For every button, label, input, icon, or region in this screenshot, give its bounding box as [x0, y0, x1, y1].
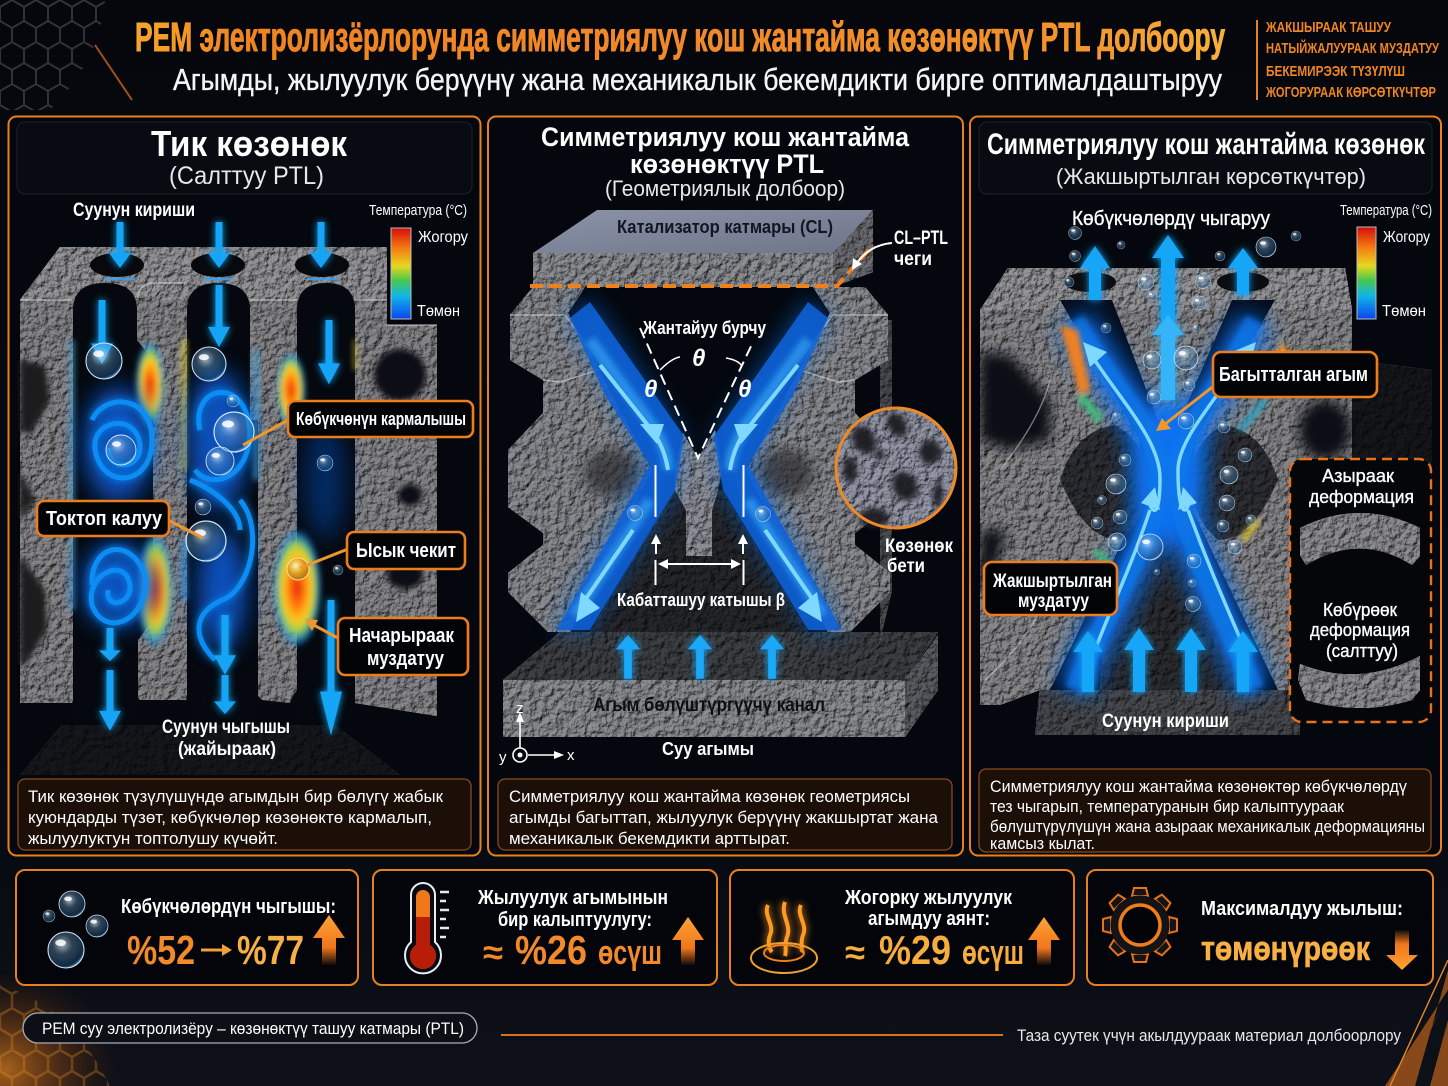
axes	[499, 700, 575, 766]
footer pill: PEM суу электролизёру – көзөнөктүү ташуу катмары (PTL)	[42, 1019, 464, 1038]
value: ≈	[845, 934, 865, 972]
catalyst layer	[533, 210, 873, 287]
CL-PTL interface dashed line and label	[530, 228, 948, 286]
callout: bubble trapping: Көбүкчөнүн кармалышы	[296, 409, 466, 429]
temperature legend: Жогору	[1383, 229, 1430, 246]
callout: directed flow	[1156, 352, 1377, 431]
inclination angle annotation: θ	[644, 376, 657, 403]
KPI card: bubble removal	[16, 870, 358, 985]
panel 1 description	[18, 779, 471, 850]
KPI card: heat flux uniformity	[373, 870, 717, 985]
heat zones on channel walls	[72, 340, 355, 648]
KPI card: heat flux uniformity: бир калыптуулугу:	[498, 909, 652, 931]
panel 2 heading: Симметриялуу кош жантайма	[541, 122, 910, 152]
panel 2 description	[498, 779, 952, 850]
panel 2 heading: көзөнөктүү PTL	[630, 149, 824, 179]
subtitle: Агымды, жылуулук берүүнү жана механикалык бекемдикти бирге оптималдаштыруу	[173, 62, 1222, 97]
value: %29	[879, 927, 951, 973]
bubbles	[86, 343, 343, 580]
water inlet label: Суунун кириши	[1102, 711, 1229, 732]
panel 3 description: тез чыгарып, температуранын бир калыптуураак	[990, 798, 1345, 816]
arrow up	[672, 917, 704, 965]
catalyst layer: Катализатор катмары (CL)	[617, 217, 833, 237]
value: өсүш	[962, 934, 1024, 972]
value: өсүш	[598, 934, 662, 972]
top-right benefits list: БЕКЕМИРЭЭК ТҮЗҮЛҮШ	[1266, 63, 1405, 80]
icon: gear	[1103, 888, 1177, 962]
panel: vertical pores	[8, 116, 480, 856]
flow distribution channel	[503, 632, 938, 737]
panel: improved performance	[970, 116, 1441, 856]
porous block with straight channels	[20, 247, 437, 775]
value	[127, 927, 304, 973]
less deformation sample	[1300, 513, 1420, 565]
up arrows	[1073, 235, 1258, 692]
deformation comparison box: деформация	[1310, 620, 1410, 640]
axes: y	[499, 749, 507, 766]
inclination angle annotation: θ	[738, 376, 751, 403]
KPI card: maximum displacement	[1087, 870, 1433, 985]
inclination angle annotation: θ	[692, 345, 705, 372]
panel 1 description: Тик көзөнөк түзүлүшүндө агымдын бир бөлүгү жабык	[28, 787, 444, 806]
pore surface magnified view	[836, 408, 956, 528]
value	[483, 927, 662, 973]
callout: stagnation	[37, 501, 203, 538]
water vortices and flow lines	[82, 222, 345, 736]
temperature legend: Жогору	[418, 229, 468, 246]
icon: thermometer	[405, 883, 449, 973]
axes: x	[567, 747, 575, 764]
callout: stagnation: Токтоп калуу	[46, 508, 163, 530]
footer tagline: Таза суутек үчүн акылдуураак материал долбоорлору	[1017, 1026, 1401, 1045]
arrow up	[313, 915, 345, 965]
CL-PTL interface dashed line and label: CL–PTL	[894, 228, 948, 249]
overlap ratio annotation	[617, 465, 785, 610]
water outlet label: Суунун чыгышы	[162, 717, 290, 738]
icon: heat	[751, 902, 817, 973]
inflow arrows	[616, 635, 784, 679]
flow distribution channel: Агым бөлүштүргүүчү канал	[593, 695, 825, 716]
porous block with X channel	[980, 268, 1432, 735]
inclined pore structure	[508, 287, 892, 640]
panel 1 description: куюндарды түзөт, көбүкчөлөр көзөнөктө кармалып,	[28, 808, 432, 827]
pore surface label: Көзөнөк	[885, 536, 953, 557]
panel 2 description: агымды багыттап, жылуулук берүүнү жакшыртат жана	[509, 808, 939, 827]
temperature legend: Төмөн	[1382, 303, 1426, 320]
pore surface label: бети	[887, 556, 925, 577]
footer pill	[23, 1013, 477, 1043]
axes: z	[516, 700, 524, 717]
panel 3 description: Симметриялуу кош жантайма көзөнөктөр көбүкчөлөрдү	[990, 778, 1408, 796]
deformation comparison box: Азыраак	[1322, 466, 1394, 486]
KPI card: high heat flux area: Жогорку жылуулук	[844, 887, 1013, 909]
CL-PTL interface dashed line and label: чеги	[894, 249, 932, 270]
arrow down	[1386, 930, 1418, 970]
value: %26	[515, 927, 587, 973]
deformation comparison box: (салттуу)	[1326, 641, 1398, 661]
deformation comparison box	[1290, 459, 1431, 722]
temperature legend	[369, 202, 468, 320]
blue inclined channels	[555, 300, 843, 632]
panel 1 heading: (Салттуу PTL)	[169, 162, 324, 190]
water outlet label	[162, 717, 290, 760]
callout: improved cooling	[984, 562, 1117, 615]
callout: hot spot: Ысык чекит	[356, 540, 456, 562]
panel 3 heading	[987, 128, 1426, 189]
bubble removal label: Көбүкчөлөрдү чыгаруу	[1072, 208, 1270, 230]
callout: poor cooling: муздатуу	[367, 648, 445, 670]
value: %52	[127, 927, 195, 973]
top-right benefits list: ЖАКШЫРААК ТАШУУ	[1265, 19, 1392, 36]
panel 2 description: Симметриялуу кош жантайма көзөнөк геометриясы	[509, 787, 910, 806]
more deformation sample	[1298, 656, 1420, 708]
panel 3 description: камсыз кылат.	[990, 835, 1095, 853]
temperature legend: Температура (°C)	[369, 202, 467, 219]
top-right benefits list	[1257, 19, 1439, 101]
panel 2 heading	[541, 122, 910, 201]
panel 3 description	[979, 769, 1431, 853]
panel 3 heading: (Жакшыртылган көрсөткүчтөр)	[1056, 164, 1366, 189]
water inlet label: Суунун кириши	[73, 200, 195, 221]
panel 1 heading	[151, 123, 348, 190]
KPI card: bubble removal: Көбүкчөлөрдүн чыгышы:	[121, 896, 336, 918]
panel 2 description: механикалык бекемдикти арттырат.	[509, 829, 790, 848]
bubbles	[1064, 226, 1301, 612]
panel: symmetric double inclined pores geometry	[488, 116, 963, 856]
panel 1 description: жылуулуктун топтолушу күчөйт.	[28, 829, 278, 848]
callout: poor cooling: Начарыраак	[349, 625, 455, 647]
icon: bubbles	[43, 891, 108, 968]
value: ≈	[483, 934, 503, 972]
directed flow streams	[1060, 240, 1284, 690]
value: %77	[237, 927, 304, 973]
callout: bubble trapping	[243, 401, 473, 445]
arrow up	[1028, 917, 1060, 965]
inclination angle annotation: Жантайуу бурчу	[642, 318, 766, 338]
deformation comparison box: Көбүрөөк	[1323, 600, 1397, 620]
lower dark centre of pore	[590, 490, 808, 632]
temperature legend	[1340, 202, 1432, 320]
panel 2 heading: (Геометриялык долбоор)	[605, 176, 845, 201]
KPI card: heat flux uniformity: Жылуулук агымынын	[477, 887, 668, 909]
overlap ratio annotation: Кабатташуу катышы β	[617, 590, 785, 610]
water flow label: Суу агымы	[662, 739, 754, 759]
callout: directed flow: Багытталган агым	[1219, 364, 1368, 386]
callout: improved cooling: Жакшыртылган	[992, 571, 1112, 592]
deformation comparison box: деформация	[1309, 487, 1414, 507]
KPI card: high heat flux area: агымдуу аянт:	[868, 908, 990, 930]
temperature legend: Төмөн	[417, 303, 460, 320]
callout: poor cooling	[305, 618, 468, 675]
KPI card: maximum displacement: Максималдуу жылыш:	[1201, 898, 1403, 920]
KPI card: high heat flux area	[730, 870, 1074, 985]
pore surface label	[885, 536, 953, 577]
channel arrows	[91, 222, 342, 736]
inclination angle annotation	[640, 318, 766, 458]
footer divider	[501, 1034, 1003, 1036]
callout: improved cooling: муздатуу	[1018, 591, 1089, 612]
panel 1 heading: Тик көзөнөк	[151, 123, 348, 164]
value	[845, 927, 1024, 973]
water outlet label: (жайыраак)	[178, 739, 276, 760]
callout: hot spot	[300, 532, 465, 569]
KPI card: maximum displacement: төмөнүрөөк	[1201, 930, 1371, 968]
